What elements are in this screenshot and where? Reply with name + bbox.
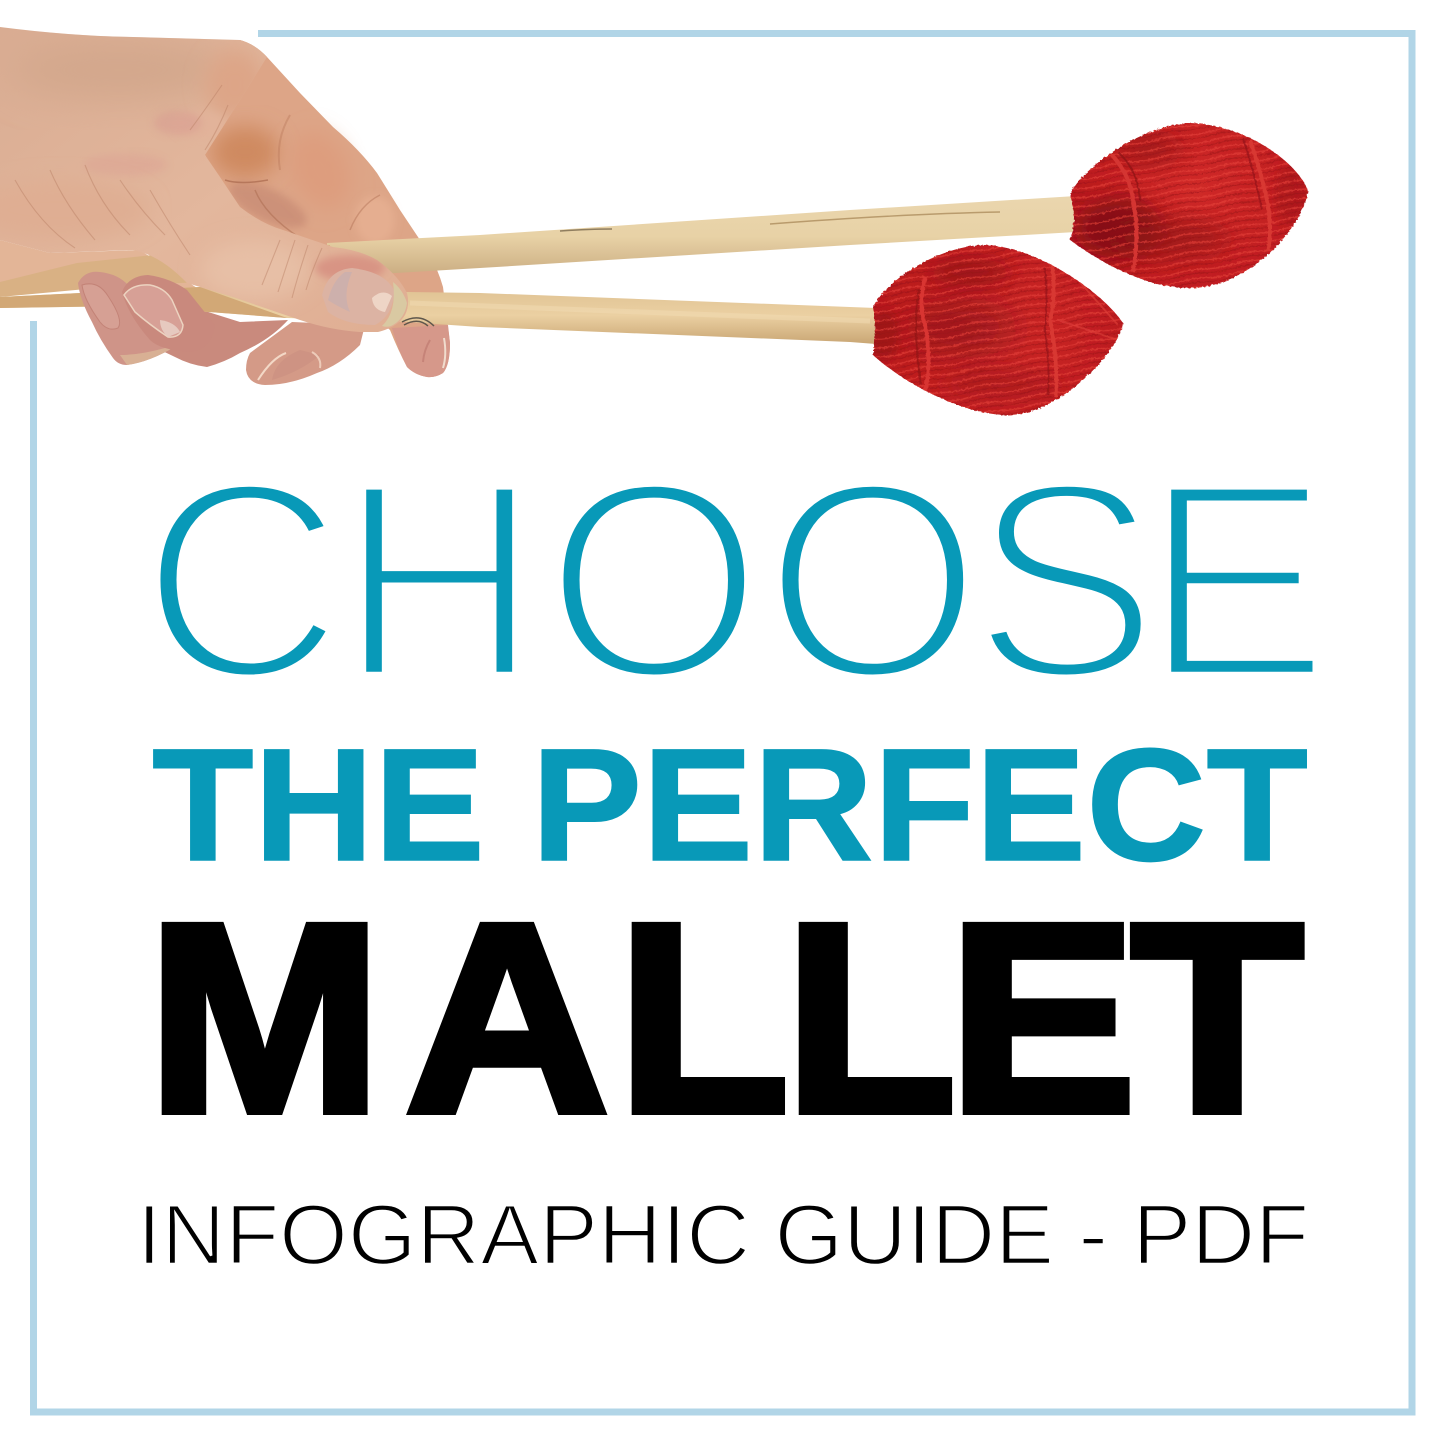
photo: hand holding two red mallets: [0, 27, 1320, 420]
thumbnail: [322, 268, 407, 327]
skin creases: [15, 85, 322, 298]
subtitle: infographic guide: INFOGRAPHIC GUIDE - PDF: [137, 1188, 1309, 1283]
heading: CHOOSE: CHOOSE: [141, 425, 1330, 737]
index finger behind sticks: [200, 40, 450, 377]
pinky finger: [78, 272, 178, 365]
heading: THE PERFECT: THE PERFECT: [152, 715, 1308, 894]
heading: MALLET: MALLET: [147, 868, 1303, 1169]
upper red mallet head: [1070, 122, 1308, 288]
lower red mallet head: [865, 240, 1130, 420]
hand back and thumb: [0, 27, 408, 332]
upper stick: [0, 196, 1076, 297]
lower stick: [0, 287, 876, 344]
ring finger body: [150, 300, 288, 367]
index fingertip below lower stick: [392, 325, 450, 377]
lower palm: [0, 240, 200, 290]
ring finger tip: [122, 275, 215, 352]
metal stick end under thumb: [402, 318, 434, 326]
middle fingertip: [246, 322, 365, 385]
